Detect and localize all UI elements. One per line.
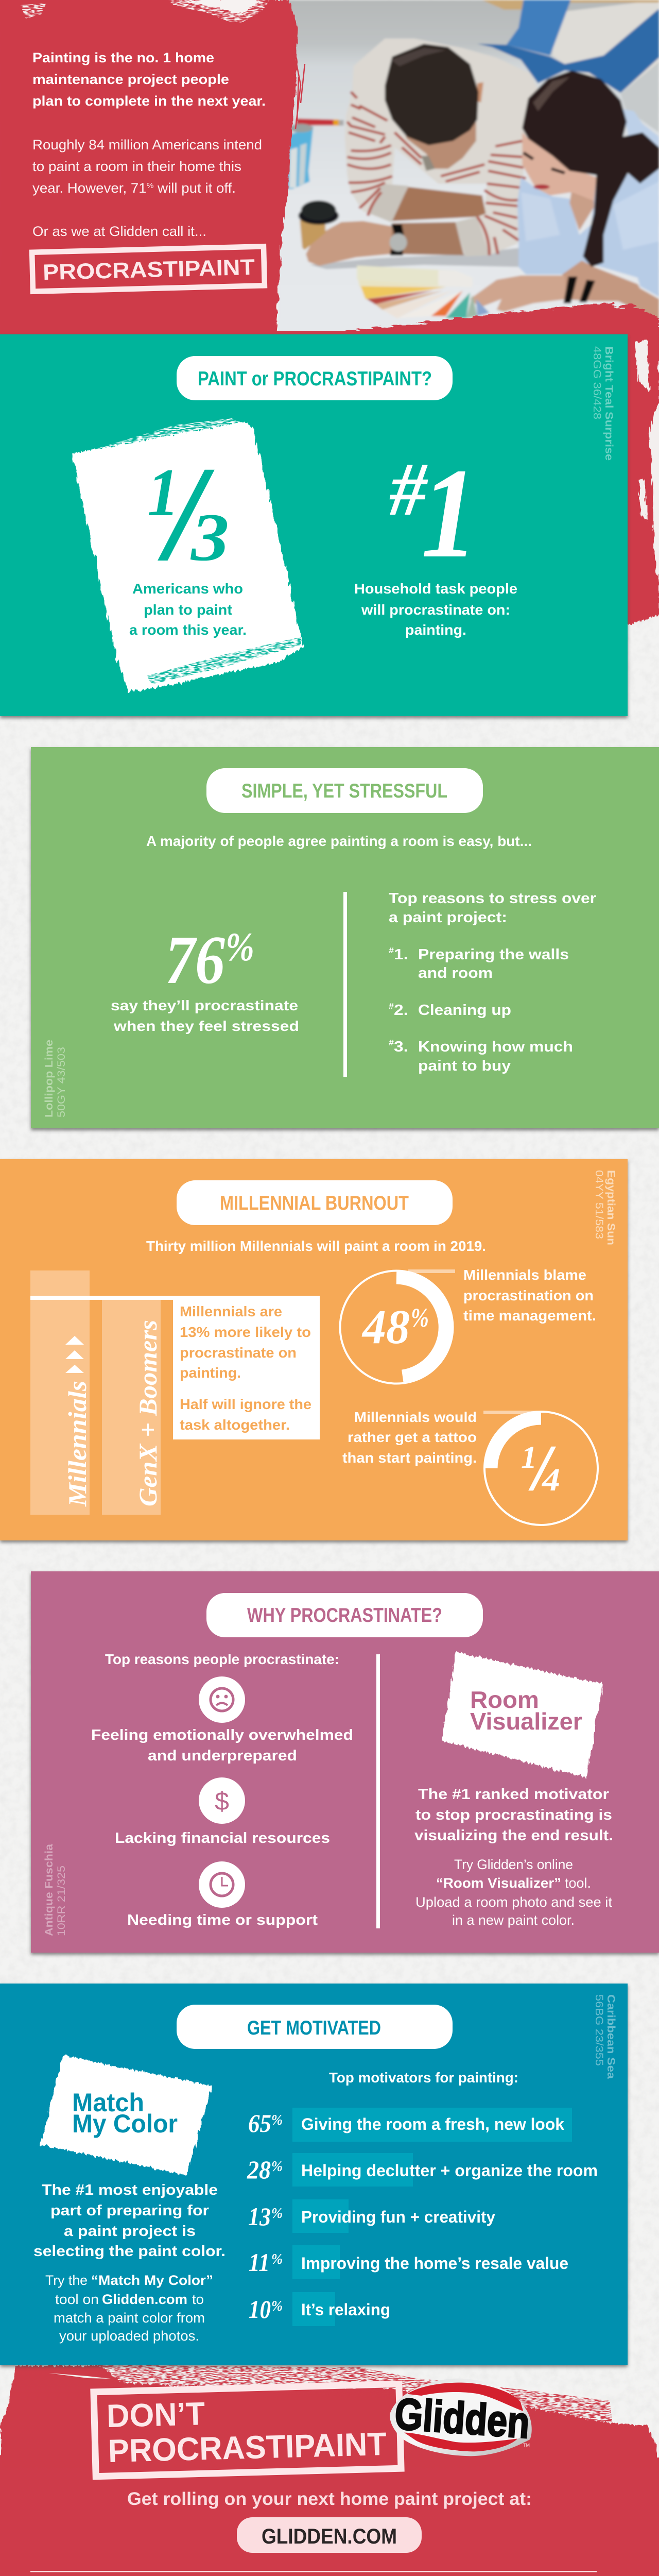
colour name: Egyptian Sun: Egyptian Sun <box>605 1170 617 1245</box>
panel: get motivated (blue) <box>0 1984 628 2365</box>
colour name: Caribbean Sea: 56BG 23/355 <box>593 1994 605 2066</box>
colour name: Egyptian Sun: 04YY 51/583 <box>593 1170 605 1239</box>
brush swatch: Room Visualizer: Visualizer <box>470 1708 582 1735</box>
brush swatch: Match My Color: My Color <box>72 2109 178 2138</box>
callout: 13 percent more likely: task altogether. <box>180 1417 290 1433</box>
stat: one third: 3 <box>190 499 229 575</box>
heading pill: MILLENNIAL BURNOUT <box>220 1192 409 1214</box>
reason: overwhelmed <box>91 1727 353 1764</box>
stamp: PROCRASTIPAINT: PROCRASTIPAINT <box>43 255 255 285</box>
panel: why procrastinate (fuschia) <box>31 1571 659 1953</box>
brush swatch: Room Visualizer <box>441 1652 603 1777</box>
reason: financial: Lacking financial resources <box>115 1830 330 1846</box>
reason: overwhelmed: and underprepared <box>148 1748 297 1764</box>
caption: Americans who plan to paint: Americans who <box>132 581 243 597</box>
text: try room visualizer: Upload a room photo and see it <box>415 1894 613 1910</box>
bar: Millennials <box>30 1270 92 1515</box>
heading pill <box>177 1180 453 1225</box>
callout: 13 percent more likely: Millennials are <box>180 1303 282 1319</box>
stat: number one <box>389 442 478 585</box>
logo: Glidden: TM <box>523 2443 530 2448</box>
panel: simple yet stressful (green) <box>31 747 659 1128</box>
bar row: 65 percent: 65 <box>248 2109 271 2138</box>
colour name: Lollipop Lime <box>43 1040 67 1117</box>
stat: one third: 1 <box>147 454 179 530</box>
white streaks in brush stroke <box>634 340 659 582</box>
callout: 13 percent more likely: Half will ignore the <box>180 1396 311 1412</box>
subheading: top motivators: Top motivators for painting: <box>329 2070 518 2086</box>
stamp: Don't Procrastipaint: PROCRASTIPAINT <box>108 2426 387 2469</box>
bar row: 11 percent: % <box>271 2251 283 2267</box>
red splash lines <box>296 64 305 129</box>
bar row: 11 percent: Improving the home’s resale value <box>301 2254 568 2273</box>
stamp: Don't Procrastipaint: DON’T <box>106 2396 205 2434</box>
callout: 13 percent more likely: 13% more likely to <box>180 1324 311 1340</box>
bar: Millennials: Millennials <box>63 1381 92 1507</box>
stamp: Don't Procrastipaint <box>94 2384 401 2477</box>
caption: household task <box>354 581 517 638</box>
hero photo: couple choosing paint colours <box>278 0 659 331</box>
bar row: 65 percent <box>248 2108 572 2142</box>
brush swatch card <box>72 418 304 692</box>
icon: dollar <box>199 1777 245 1824</box>
hero red painted panel <box>0 0 305 335</box>
intro line: Thirty million Millennials will paint a room in 2019. <box>146 1238 486 1254</box>
colour name: Lollipop Lime: Lollipop Lime <box>43 1040 55 1117</box>
hero copy: maintenance project people <box>32 72 229 87</box>
text: try room visualizer <box>415 1857 613 1928</box>
colour name: Caribbean Sea <box>593 1994 617 2079</box>
stat: one third: / <box>160 441 213 587</box>
hero copy: year. However, 71 <box>32 180 144 196</box>
colour name: Egyptian Sun <box>593 1170 617 1245</box>
list: top reasons to stress: Top reasons to stress over <box>389 890 596 907</box>
reason: time: Needing time or support <box>127 1912 318 1928</box>
colour name: Antique Fuschia <box>43 1844 67 1936</box>
text: try room visualizer: in a new paint color. <box>452 1912 575 1928</box>
red brush stroke right of teal panel <box>618 330 659 626</box>
colour name: Bright Teal Surprise <box>591 346 615 461</box>
heading pill <box>206 768 483 813</box>
footer red brush stroke <box>0 2365 659 2576</box>
text: try room visualizer: tool. <box>565 1875 591 1891</box>
text: most enjoyable part: The #1 most enjoyable <box>42 2182 218 2198</box>
website pill: GLIDDEN.COM <box>262 2524 397 2548</box>
bar row: 28 percent: 28 <box>247 2155 271 2184</box>
heading pill: GET MOTIVATED <box>247 2017 381 2039</box>
heading pill: WHY PROCRASTINATE? <box>247 1604 442 1626</box>
hero copy: Or as we at Glidden call it... <box>32 224 206 239</box>
panel: paint or procrastipaint (teal) <box>0 334 628 716</box>
bar row: 13 percent: % <box>271 2206 283 2222</box>
donut chart: one quarter: / <box>529 1433 555 1503</box>
hero copy: plan to complete in the next year. <box>32 93 266 109</box>
bar row: 28 percent: % <box>271 2159 283 2175</box>
bar row: 10 percent: It’s relaxing <box>301 2300 390 2319</box>
reason: overwhelmed: Feeling emotionally overwhelmed <box>91 1727 353 1743</box>
stat: 76 percent: 76 <box>165 922 225 998</box>
caption: time management: procrastination on <box>463 1287 594 1303</box>
text: try match my color: Try the <box>45 2273 88 2288</box>
bar row: 10 percent <box>249 2292 390 2326</box>
donut chart: 48 percent: % <box>411 1303 429 1333</box>
heading pill <box>206 1593 483 1637</box>
list: top reasons to stress: Cleaning up <box>418 1002 511 1019</box>
caption: procrastinate when stressed: when they feel stressed <box>113 1018 299 1034</box>
list: top reasons to stress: # <box>389 1002 394 1011</box>
bar row: 65 percent: Giving the room a fresh, new look <box>301 2115 564 2133</box>
donut chart: one quarter <box>483 1411 598 1525</box>
text: try match my color: tool on <box>55 2292 99 2307</box>
brush swatch: Match My Color <box>41 2055 212 2175</box>
donut chart: one quarter: 1 <box>521 1440 537 1475</box>
caption: procrastinate when stressed <box>111 997 299 1034</box>
donut chart: 48 percent <box>340 1269 455 1384</box>
bar row: 11 percent: 11 <box>249 2248 270 2277</box>
caption: Americans who plan to paint: a room this year. <box>129 622 247 638</box>
subheading: top reasons: Top reasons people procrastinate: <box>105 1651 339 1667</box>
colour name: Bright Teal Surprise: 48GG 36/428 <box>591 346 603 419</box>
list: top reasons to stress: 1. <box>394 946 408 963</box>
logo: Glidden: Glidden <box>393 2389 531 2448</box>
hero copy: will put it off. <box>153 180 236 196</box>
caption: time management <box>463 1267 596 1324</box>
bar row: 13 percent <box>248 2199 495 2233</box>
text: most enjoyable part: part of preparing for <box>50 2202 209 2219</box>
bar row: 28 percent <box>247 2153 598 2187</box>
stat: one third <box>147 441 229 587</box>
text: try match my color: “Match My Color” <box>91 2273 213 2288</box>
bar row: 28 percent: Helping declutter + organize the room <box>301 2161 598 2180</box>
icon: clock <box>199 1861 245 1908</box>
text: try room visualizer: “Room Visualizer” <box>436 1875 561 1891</box>
list: top reasons to stress: paint to buy <box>418 1058 511 1074</box>
list: top reasons to stress: Knowing how much <box>418 1039 573 1055</box>
list: top reasons to stress: # <box>389 1039 394 1047</box>
white paint flecks at top of red panel <box>21 0 270 23</box>
logo: Glidden <box>390 2379 532 2456</box>
text: ranked motivator: The #1 ranked motivator <box>418 1786 609 1803</box>
heading pill: SIMPLE, YET STRESSFUL <box>241 780 447 802</box>
bar row: 10 percent: 10 <box>249 2295 271 2324</box>
caption: Americans who plan to paint: plan to paint <box>144 602 232 618</box>
hero copy: to paint a room in their home this <box>32 159 241 174</box>
bar row: 13 percent: Providing fun + creativity <box>301 2208 495 2226</box>
bar row: 13 percent: 13 <box>248 2202 271 2231</box>
caption: household task: will procrastinate on: <box>361 602 510 618</box>
donut chart: 48 percent: 48 <box>361 1300 410 1354</box>
text: try match my color: your uploaded photos. <box>59 2328 199 2344</box>
list: top reasons to stress: a paint project: <box>389 909 507 926</box>
colour name: Bright Teal Surprise: Bright Teal Surprise <box>603 346 615 461</box>
stamp: PROCRASTIPAINT <box>32 246 265 292</box>
bar row: 11 percent <box>249 2245 568 2279</box>
list: top reasons to stress <box>389 890 596 1074</box>
colour name: Caribbean Sea: Caribbean Sea <box>605 1994 617 2079</box>
hero copy: Roughly 84 million Americans intend <box>32 137 262 152</box>
list: top reasons to stress: # <box>389 946 394 955</box>
caption: household task: painting. <box>405 622 466 638</box>
caption: time management: Millennials blame <box>463 1267 586 1283</box>
text: most enjoyable part <box>33 2182 226 2260</box>
colour name: Antique Fuschia: Antique Fuschia <box>43 1844 55 1936</box>
stat: number one: 1 <box>421 442 478 585</box>
caption: rather get a tattoo: rather get a tattoo <box>348 1429 477 1445</box>
text: try match my color <box>45 2273 213 2344</box>
callout: 13 percent more likely: painting. <box>180 1365 241 1381</box>
panel: millennial burnout (orange) <box>0 1159 628 1540</box>
caption: rather get a tattoo: Millennials would <box>354 1409 477 1425</box>
icon: dollar: $ <box>215 1787 229 1816</box>
hero copy: % <box>147 181 153 190</box>
heading pill: PAINT or PROCRASTIPAINT? <box>198 368 432 390</box>
text: try room visualizer: Try Glidden’s online <box>454 1857 573 1872</box>
hero copy <box>32 50 266 239</box>
heading pill <box>177 2005 453 2049</box>
callout: 13 percent more likely <box>173 1296 320 1439</box>
colour name: Lollipop Lime: 50GY 43/503 <box>56 1047 67 1117</box>
text: ranked motivator <box>414 1786 613 1844</box>
brush swatch: Match My Color: Match <box>72 2088 144 2117</box>
list: top reasons to stress: 3. <box>394 1039 408 1055</box>
text: most enjoyable part: a paint project is <box>64 2223 196 2240</box>
text: ranked motivator: to stop procrastinating is <box>415 1807 612 1823</box>
caption: Americans who plan to paint <box>129 581 247 638</box>
red brush stroke at bottom of photo <box>273 302 659 336</box>
text: try match my color: Glidden.com <box>102 2292 187 2307</box>
caption: rather get a tattoo: than start painting. <box>342 1450 477 1466</box>
bar row: 65 percent: % <box>271 2112 283 2128</box>
text: try match my color: match a paint color from <box>54 2310 205 2326</box>
brush swatch: Room Visualizer: Room <box>470 1686 539 1713</box>
bar row: 10 percent: % <box>271 2298 283 2314</box>
donut chart: one quarter: 4 <box>542 1463 560 1498</box>
heading pill <box>177 356 453 400</box>
caption: household task: Household task people <box>354 581 517 597</box>
icon: sad face <box>199 1676 245 1723</box>
dry brush speckle edge <box>98 2365 613 2424</box>
colour name: Antique Fuschia: 10RR 21/325 <box>56 1866 67 1936</box>
website pill <box>237 2517 422 2553</box>
hero copy: Painting is the no. 1 home <box>32 50 214 65</box>
list: top reasons to stress: 2. <box>394 1002 408 1019</box>
text: ranked motivator: visualizing the end result. <box>414 1827 613 1844</box>
caption: procrastinate when stressed: say they’ll procrastinate <box>111 997 298 1013</box>
text: most enjoyable part: selecting the paint color. <box>33 2243 226 2260</box>
stat: number one: # <box>389 447 428 532</box>
list: top reasons to stress: Preparing the walls <box>418 946 569 963</box>
call to action: Get rolling on your next home paint project at: <box>127 2489 532 2509</box>
intro line: A majority of people agree painting a room is easy, but... <box>146 833 532 849</box>
bar: GenX + Boomers <box>102 1299 162 1515</box>
list: top reasons to stress: and room <box>418 965 493 981</box>
white streak <box>49 2373 111 2379</box>
text: try match my color: to <box>192 2292 204 2307</box>
bar: GenX + Boomers: GenX + Boomers <box>133 1320 162 1506</box>
stat: 76 percent: % <box>226 924 254 969</box>
callout: 13 percent more likely: procrastinate on <box>180 1345 297 1361</box>
caption: time management: time management. <box>463 1308 596 1324</box>
caption: rather get a tattoo <box>342 1409 477 1466</box>
